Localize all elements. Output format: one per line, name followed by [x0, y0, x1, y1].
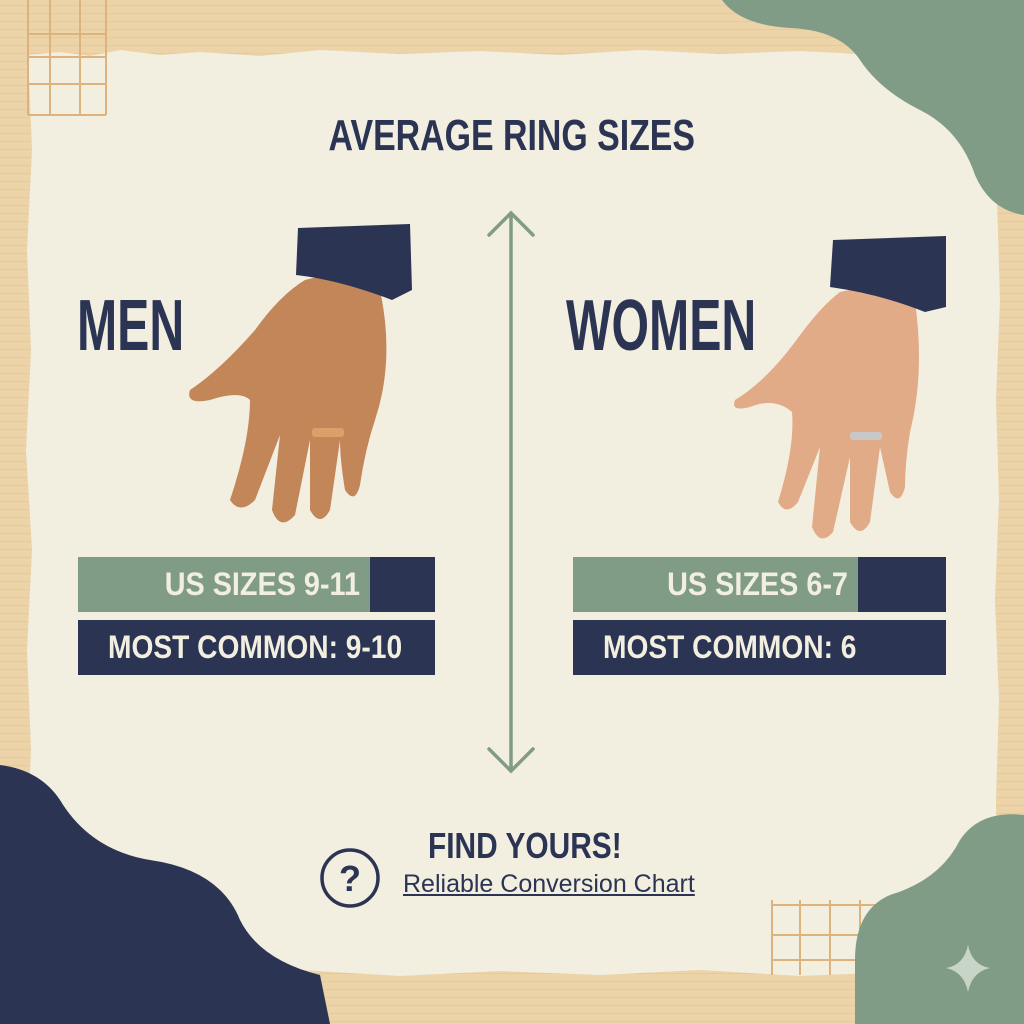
bar: men most common: [78, 620, 435, 675]
bar: women most common: MOST COMMON: 6: [603, 629, 856, 665]
icon: question circle: [320, 848, 380, 908]
blob top-right: [722, 0, 1024, 215]
bar: women range: [573, 557, 946, 612]
sparkle: [946, 945, 990, 992]
callout heading: FIND YOURS!: [428, 825, 622, 866]
icon: men hand: [189, 224, 412, 522]
arrow: divider: [487, 210, 535, 774]
panel: men sizes: [78, 557, 435, 675]
bar: women range: US SIZES 6-7: [667, 566, 848, 602]
icon: question circle: ?: [339, 858, 361, 899]
blob bottom-left: [0, 765, 330, 1024]
bar: men most common: MOST COMMON: 9-10: [108, 629, 402, 665]
panel: women sizes: [573, 557, 946, 675]
blob bottom-right: [855, 814, 1024, 1024]
heading: men: MEN: [77, 286, 184, 366]
bar: men range: [78, 557, 435, 612]
bar: women most common: [573, 620, 946, 675]
icon: women hand: [734, 236, 946, 538]
link text: Reliable Conversion Chart: [403, 870, 695, 898]
heading: women: WOMEN: [566, 286, 756, 366]
bar: men range: US SIZES 9-11: [165, 566, 360, 602]
title: AVERAGE RING SIZES: [329, 111, 695, 160]
